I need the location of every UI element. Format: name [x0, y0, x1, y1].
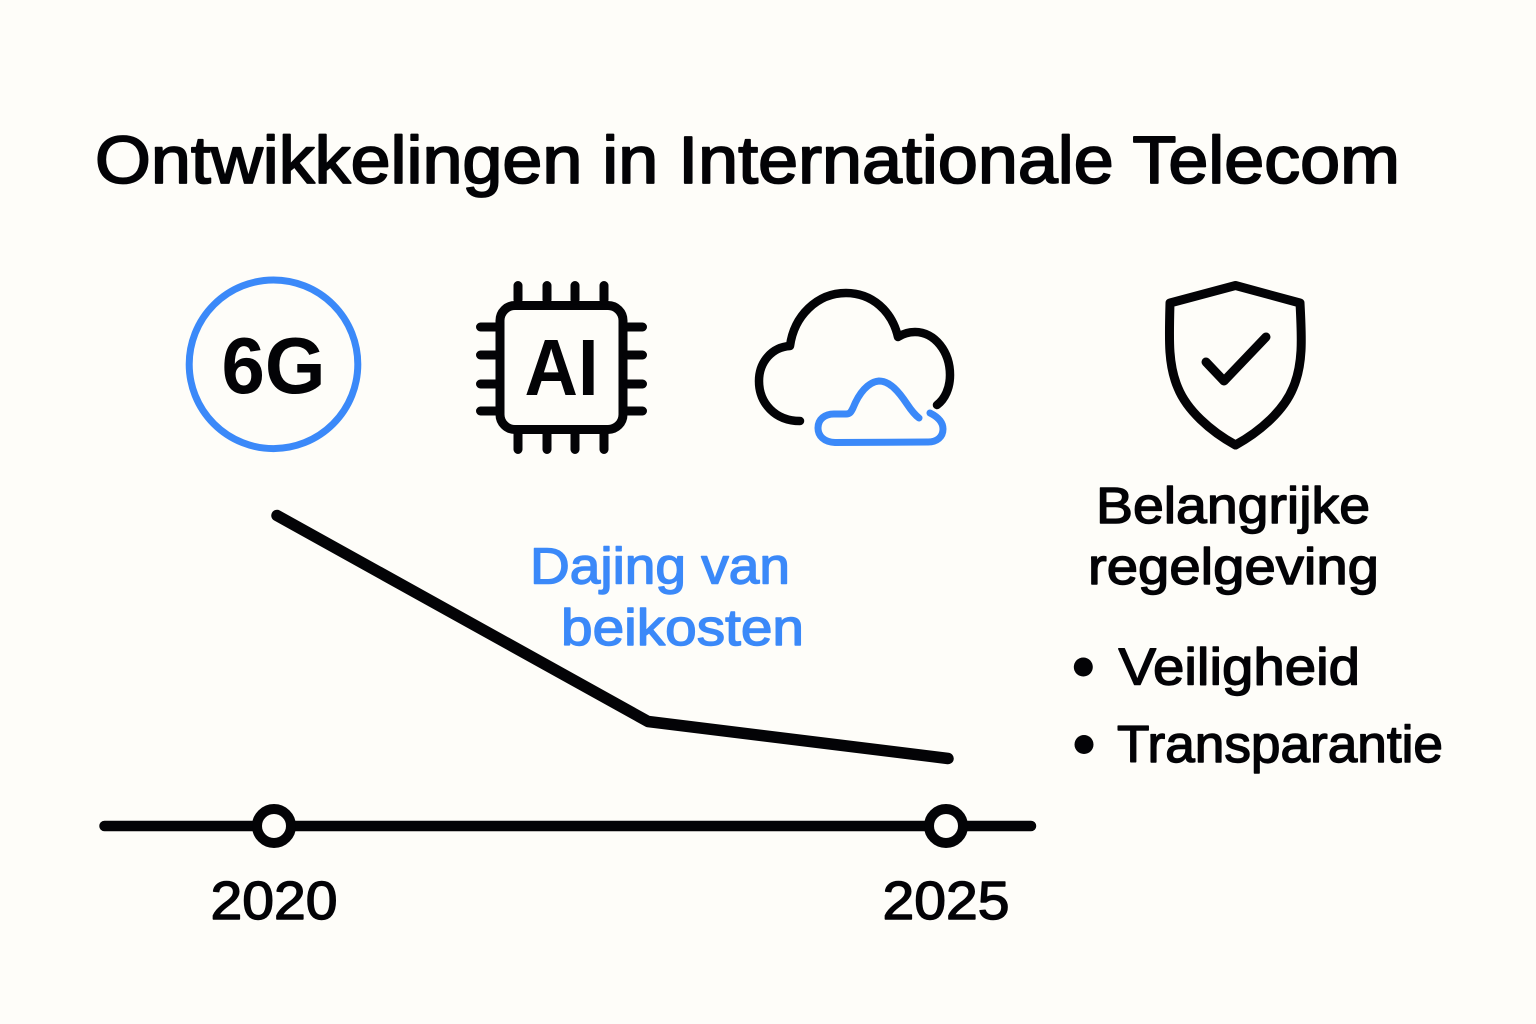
heading: regulation — [1088, 477, 1379, 595]
timeline — [104, 809, 1031, 843]
icon: 6G circle: 6G — [222, 321, 326, 410]
year label 2025: 2025 — [882, 871, 1010, 931]
icon: AI chip — [480, 286, 642, 450]
year label 2020: 2020 — [210, 871, 338, 931]
bullet list — [1074, 638, 1443, 774]
icon: cloud — [759, 293, 950, 442]
icon: AI chip: AI — [524, 323, 598, 412]
bullet list: Veiligheid — [1118, 638, 1360, 696]
heading: regulation: regelgeving — [1088, 538, 1379, 595]
line chart: declining costs — [277, 516, 948, 758]
chart label — [530, 538, 804, 656]
chart label: beikosten — [561, 599, 804, 656]
icon: shield with check — [1169, 286, 1301, 445]
heading: regulation: Belangrijke — [1096, 477, 1370, 534]
icon: 6G circle — [189, 280, 358, 449]
title: Ontwikkelingen in Internationale Telecom — [95, 123, 1400, 198]
chart label: Dajing van — [530, 538, 790, 594]
bullet list: Transparantie — [1117, 716, 1443, 774]
